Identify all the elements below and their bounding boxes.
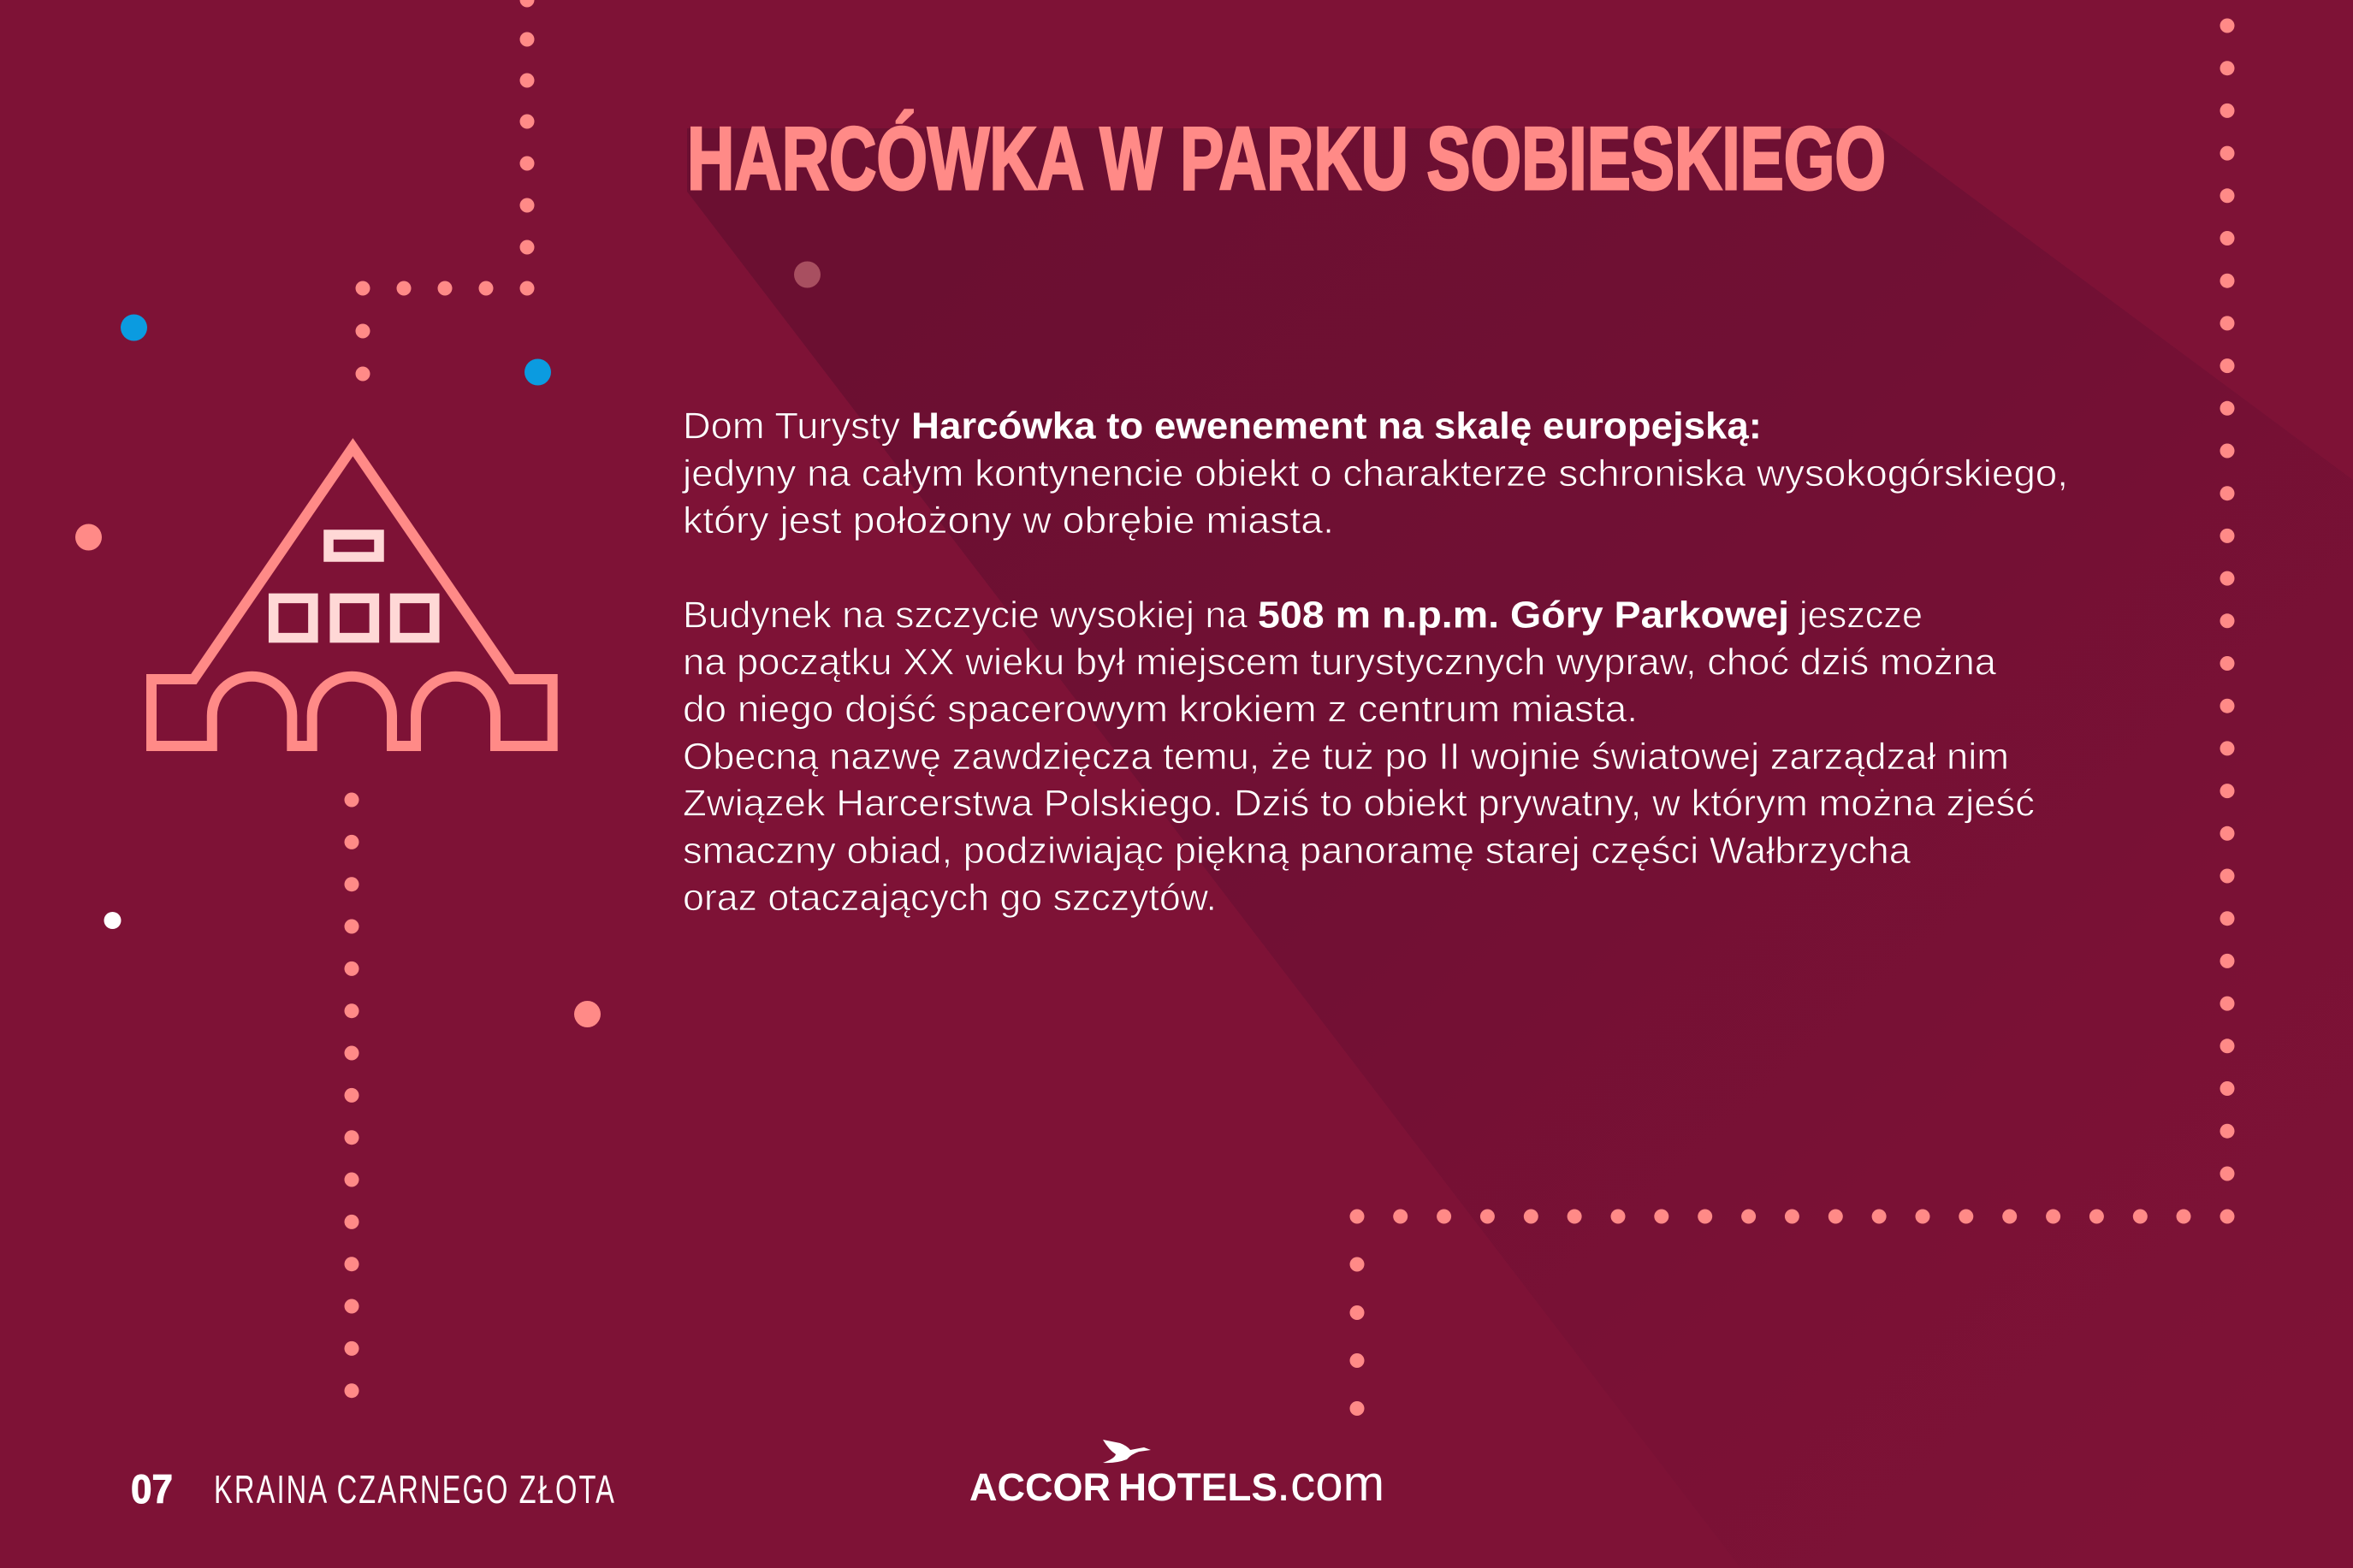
body text: paragraph 2: na początku XX wieku był miejscem turystycznych wypraw, choć dziś można bbox=[683, 641, 1997, 683]
body text: paragraph 2: jeszcze bbox=[1798, 594, 1923, 636]
footer: page number: 07 bbox=[131, 1466, 173, 1512]
icon: Harcówka house bbox=[151, 447, 553, 746]
body text: paragraph 1: Harcówka to ewenement na skalę europejską: bbox=[911, 405, 1762, 447]
footer: chapter name: KRAINA CZARNEGO ZŁOTA bbox=[214, 1467, 616, 1512]
title: HARCÓWKA W PARKU SOBIESKIEGO bbox=[687, 109, 1886, 209]
dotted line: top left bbox=[356, 0, 534, 382]
body text: paragraph 2: smaczny obiad, podziwiając piękną panoramę starej części Wałbrzycha bbox=[683, 830, 1911, 872]
logo: AccorHotels.com: HOTELS bbox=[1118, 1465, 1277, 1509]
logo: AccorHotels.com: .com bbox=[1277, 1456, 1384, 1512]
logo: AccorHotels.com: ACCOR bbox=[969, 1465, 1111, 1509]
body text: paragraph 1: jedyny na całym kontynencie obiekt o charakterze schroniska wysokogórskiego, bbox=[681, 453, 2068, 494]
dotted line: right and bottom bbox=[1350, 19, 2235, 1416]
body text: paragraph 2: oraz otaczających go szczytów. bbox=[683, 877, 1217, 919]
body text: paragraph 1 bbox=[681, 405, 2068, 541]
body text: paragraph 2: Związek Harcerstwa Polskiego. Dziś to obiekt prywatny, w którym można zjeść bbox=[683, 782, 2035, 825]
body text: paragraph 2: 508 m n.p.m. Góry Parkowej bbox=[1258, 594, 1789, 636]
body text: paragraph 2: Budynek na szczycie wysokiej na bbox=[683, 594, 1248, 636]
body text: paragraph 2 bbox=[683, 594, 2035, 919]
body text: paragraph 2: Obecną nazwę zawdzięcza temu, że tuż po II wojnie światowej zarządzał nim bbox=[683, 736, 2009, 778]
long shadow of title bbox=[687, 128, 2353, 1568]
decorative confetti dots bbox=[75, 262, 821, 1027]
body text: paragraph 1: Dom Turysty bbox=[683, 405, 900, 447]
body text: paragraph 2: do niego dojść spacerowym krokiem z centrum miasta. bbox=[683, 688, 1638, 731]
dotted line: below house bbox=[344, 792, 359, 1398]
body text: paragraph 1: który jest położony w obrębie miasta. bbox=[683, 500, 1334, 541]
logo: AccorHotels.com bbox=[969, 1440, 1384, 1512]
